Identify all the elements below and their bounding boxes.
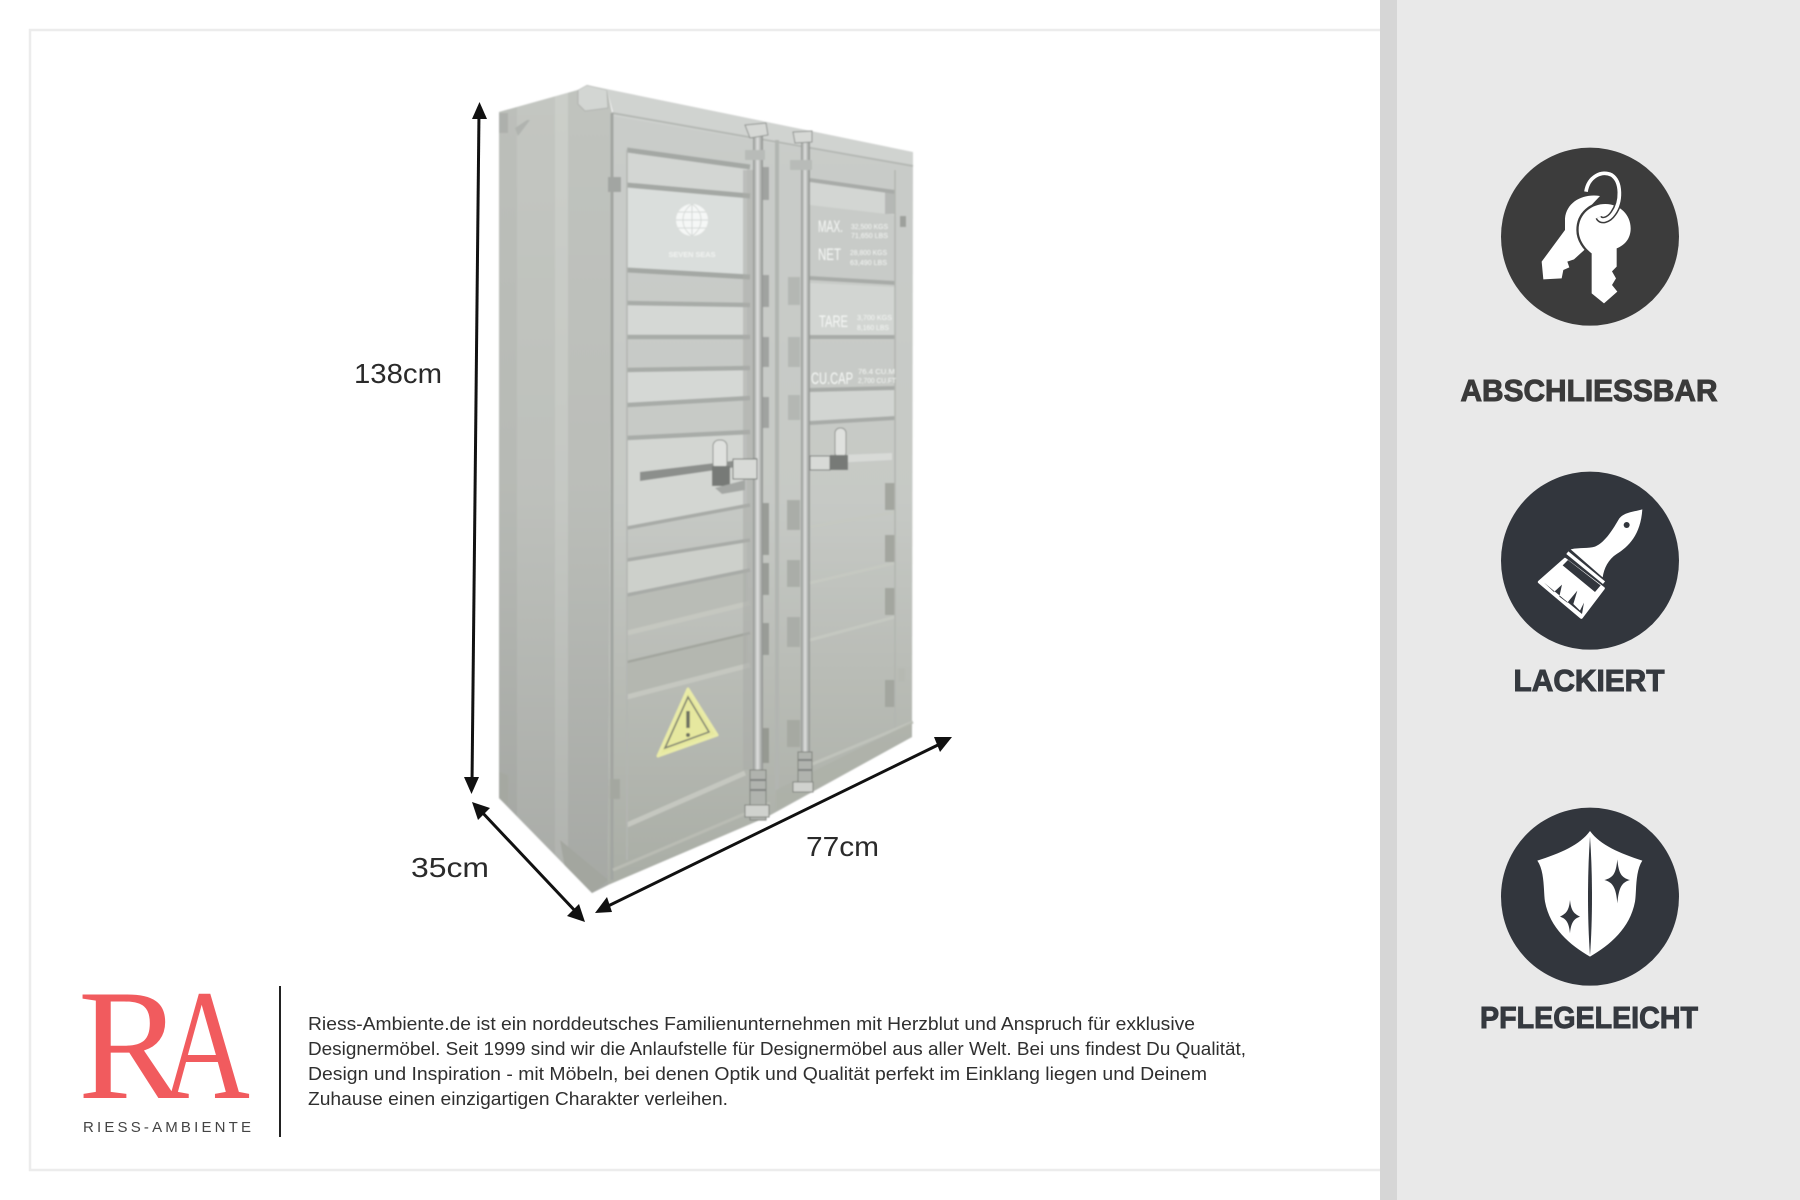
right door handle [810,428,892,470]
company description: Designermöbel. Seit 1999 sind wir die Anlaufstelle für Designermöbel aus aller Welt. Bei uns findest Du Qualität, [308,1039,1246,1059]
cabinet front face [608,113,913,885]
door capacity labels: 2,700 CU.FT [858,378,897,385]
top rail [587,85,913,167]
logo [78,957,251,1136]
door capacity labels: MAX. [818,217,843,236]
door capacity labels: 32,500 KGS [851,224,888,231]
left door handle [640,440,757,494]
company description: Riess-Ambiente.de ist ein norddeutsches Familienunternehmen mit Herzblut und Anspruch für exklusive [308,1014,1195,1034]
company description [308,1014,1246,1109]
door hinges [608,177,906,799]
rods [745,123,813,820]
icon: paint brush [1501,472,1679,650]
globe logo [676,204,708,236]
label: easy care: PFLEGELEICHT [1480,1000,1698,1035]
label: height: 138cm [354,358,442,389]
door capacity labels: 28,800 KGS [850,250,887,257]
door capacity labels [811,217,897,388]
right door slats [776,170,913,810]
company description: Zuhause einen einzigartigen Charakter verleihen. [308,1089,728,1109]
central door columns [743,140,800,790]
label: width: 77cm [806,831,879,862]
cabinet side face [495,80,615,900]
door capacity labels: 63,490 LBS [850,260,887,267]
arrow: width [595,737,952,913]
label: lockable: ABSCHLIESSBAR [1460,373,1718,408]
main frame [30,30,1380,1170]
door capacity labels: 3,700 KGS [857,315,892,322]
label: lacquered: LACKIERT [1514,663,1665,698]
label: depth: 35cm [411,852,489,883]
door capacity labels: CU.CAP [811,369,853,388]
logo monogram: R [78,958,184,1133]
door capacity labels: 8,160 LBS [857,325,889,332]
logo monogram: A [161,957,250,1133]
arrow: height [464,102,487,794]
brand text on door: SEVEN SEAS [668,250,716,259]
divider [279,986,281,1137]
warning triangle [658,689,717,756]
door capacity labels: TARE [819,312,848,331]
panel: features sidebar [1380,0,1800,1200]
icon: shield [1501,808,1679,986]
icon: keys [1501,148,1679,326]
left door slats [627,150,750,860]
door capacity labels: NET [818,245,841,264]
arrow: depth [472,802,585,922]
logo wordmark: RIESS-AMBIENTE [83,1119,251,1136]
logo monogram [78,957,250,1133]
door capacity labels: 76.4 CU.M [858,369,895,376]
door capacity labels: 71,650 LBS [851,233,888,240]
company description: Design und Inspiration - mit Möbeln, bei denen Optik und Qualität perfekt im Einklang liegen und Deinem [308,1064,1207,1084]
product image: container cabinet [495,80,913,900]
